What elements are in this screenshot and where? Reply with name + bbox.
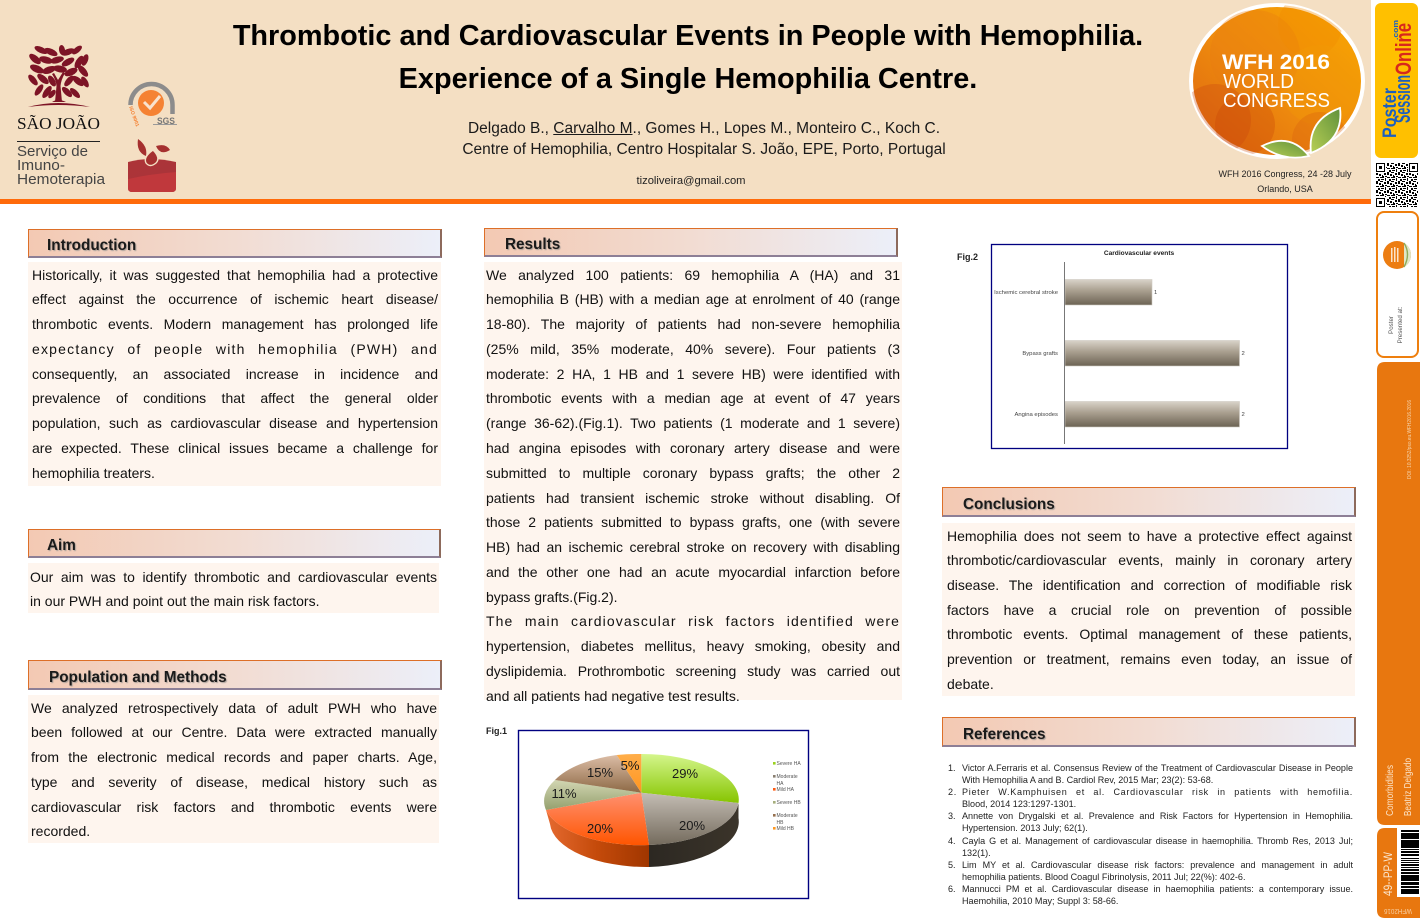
panel: poster number and barcode: WFH2016 [1384,907,1412,914]
text: Results: hemophilia B (HB) with a median age at enrolment of 40 (range [486,291,900,307]
pie chart: patient distribution: 20% [587,821,613,836]
QR code [1376,163,1418,207]
text: Population and Methods: been followed at our Centre. Data were extracted manually [31,724,437,740]
text: Aim: in our PWH and point out the main risk factors. [30,593,319,609]
heading: Population and Methods: Population and Methods [49,669,227,686]
heading: Aim: Aim [47,537,76,554]
reference list: 2. [948,787,957,797]
congress details: Orlando, USA [1257,184,1313,194]
text: Introduction: are expected. These clinical issues became a challenge for [32,440,438,456]
icon: ISO SGS certification seal [127,82,177,128]
panel: presented at [1376,211,1419,358]
text: Results: dyslipidemia. Prothrombotic screening study was carried out [486,663,900,679]
pie chart: patient distribution: 5% [621,758,640,773]
figure label: Fig.1: Fig.1 [486,726,507,736]
text: Population and Methods: We analyzed retrospectively data of adult PWH who have [31,700,437,716]
reference list: 1. [948,763,956,773]
header rule [0,199,1371,204]
pie chart: patient distribution: 20% [679,818,705,833]
text: Results: bypass grafts.(Fig.2). [486,589,618,605]
panel: poster session brand [1375,3,1418,158]
text: Introduction: population, such as cardiovascular disease and hypertension [32,415,438,431]
pie chart: patient distribution: 15% [587,765,613,780]
pie chart: patient distribution: Mild HA [776,787,795,793]
bar chart: cardiovascular events: 1 [1154,290,1157,296]
text: Conclusions: thrombotic/cardiovascular events, mainly in coronary artery [947,552,1352,568]
text: Results: hypertension, diabetes mellitus, heavy smoking, obesity and [486,638,900,654]
figure label: Fig.2: Fig.2 [957,252,978,262]
bar chart: cardiovascular events: Cardiovascular events [1104,250,1175,257]
pie chart: patient distribution: Moderate [776,813,798,819]
header band [0,0,1371,204]
text: Population and Methods: recorded. [31,823,90,839]
panel: poster session brand: Poster [1380,87,1401,138]
text: Results: and all patients had negative test results. [486,688,740,704]
pie chart: patient distribution: Moderate [776,774,798,780]
text: Introduction [28,262,441,486]
text: Results [484,262,902,700]
logo: Sao Joao hospital: Hemoterapia [17,171,106,188]
heading: References: References [963,726,1045,743]
logo: WFH 2016 World Congress: CONGRESS [1223,90,1330,112]
text: Results: (range 36-62).(Fig.1). Two patients (1 moderate and 1 severe) [486,415,900,431]
reference list [948,763,1353,906]
pie chart: patient distribution: Mild HB [776,826,795,832]
heading: Conclusions [942,487,1356,517]
heading: Introduction [28,229,442,258]
bar chart: cardiovascular events: 2 [1242,412,1245,418]
logo: Sao Joao hospital: SÃO JOÃO [17,114,100,133]
text: Introduction: thrombotic events. Modern management has prolonged life [32,316,438,332]
logo: Sao Joao hospital [17,45,106,188]
text: Introduction: Historically, it was suggested that hemophilia had a protective [32,266,438,282]
pie chart: patient distribution [518,730,810,900]
logo: WFH 2016 World Congress: WFH 2016 [1222,51,1330,74]
text: Results: We analyzed 100 patients: 69 hemophilia A (HA) and 31 [486,266,900,282]
panel: poster topic and author: Comorbidities [1384,765,1396,816]
heading: Population and Methods [28,660,442,690]
panel: poster session brand: Session [1390,75,1415,123]
bar chart: cardiovascular events: Ischemic cerebral stroke [994,290,1059,296]
text: Results: HB) had an ischemic cerebral stroke on recovery with disabling [486,539,900,555]
text: Results: 18-80). The majority of patients had non-severe hemophilia [486,316,900,332]
reference list: Haemohilia, 2010 May; Suppl 3: 58-66. [962,896,1118,906]
text: Conclusions: Hemophilia does not seem to have a protective effect against [947,528,1352,544]
icon: blood drop and leaves [128,139,176,192]
text: Results: thrombotic events with a median age at event of 47 years [486,390,900,406]
text: Results: those 2 patients submitted to bypass grafts, one (with severe [486,514,900,530]
text: Introduction: effect against the occurrence of ischemic heart disease/ [32,291,438,307]
text: Population and Methods: cardiovascular risk factors and thrombotic events were [31,799,437,815]
text: Population and Methods [28,695,439,843]
heading: Aim [28,529,441,558]
text: Results: moderate: 2 HA, 1 HB and 1 severe HB) were identified with [486,366,900,382]
title: Experience of a Single Hemophilia Centre. [399,62,977,94]
pie chart: patient distribution: 11% [551,786,577,801]
heading: Results [484,228,898,257]
text: Conclusions [942,523,1355,696]
reference list: Victor A.Ferraris et al. Consensus Review of the Treatment of Cardiovascular Disease in People [962,763,1353,773]
panel: poster number and barcode [1377,828,1420,918]
logo: Sao Joao hospital: Imuno- [17,157,65,174]
text: Results: (25% mild, 35% moderate, 40% severe). Four patients (3 [486,341,900,357]
pie chart: patient distribution: HA [776,781,784,787]
authors and affiliation [462,120,946,158]
panel: poster topic and author: DOI: 10.3252/pso.eu.WFH2016.2016 [1407,400,1413,479]
text: Introduction: expectancy of people with hemophilia (PWH) and [32,341,438,357]
reference list: Cayla G et al. Management of cardiovascular disease in haemophilia. Thromb Res, 2013 Jul; [962,836,1353,846]
heading: Results: Results [505,236,560,253]
reference list: Blood, 2014 123:1297-1301. [962,799,1076,809]
heading: Conclusions: Conclusions [963,496,1055,513]
text: Introduction: consequently, an associated increase in incidence and [32,366,438,382]
text: Results: submitted to multiple coronary bypass grafts; the other 2 [486,465,900,481]
panel: poster topic and author: Beatriz Delgado [1402,758,1414,816]
bar chart: cardiovascular events: Angina episodes [1014,412,1058,418]
pie chart: patient distribution: HB [776,820,784,826]
reference list: 4. [948,836,956,846]
pie chart: patient distribution: Severe HA [776,761,801,767]
text: Results: patients had transient ischemic stroke without disabling. Of [486,490,900,506]
text: Results: and the other one had an acute myocardial infarction before [486,564,900,580]
text: Conclusions: disease. The identification and correction of modifiable risk [947,577,1352,593]
panel: poster session brand: Online [1391,23,1416,75]
logo: WFH 2016 World Congress: WORLD [1223,71,1294,93]
text: Aim: Our aim was to identify thrombotic and cardiovascular events [30,568,437,584]
reference list: Pieter W.Kamphuisen et al. Cardiovascular risk in patients with hemofilia. [962,787,1353,797]
reference list: 6. [948,884,956,894]
reference list: Lim MY et al. Cardiovascular disease risk factors: prevalence and management in adult [962,860,1353,870]
reference list: Hypertension. 2013 July; 62(1). [962,823,1088,833]
icon: ISO SGS certification seal: ISO 9001 [127,106,140,128]
text: Aim [28,563,439,613]
congress details: WFH 2016 Congress, 24 -28 July [1218,169,1352,179]
icon: ISO SGS certification seal: SGS [157,116,175,126]
text: Results: The main cardiovascular risk factors identified were [486,613,900,629]
authors and affiliation: Centre of Hemophilia, Centro Hospitalar S. João, EPE, Porto, Portugal [462,141,946,158]
text: Conclusions: thrombotic events. Optimal management of these patients, [947,626,1352,642]
reference list: With Hemophilia A and B. Cardiol Rev, 2015 Mar; 23(2): 53-68. [962,775,1213,785]
text: Introduction: hemophilia treaters. [32,465,155,481]
panel: presented at: Presented at: [1397,306,1404,343]
reference list: 3. [948,811,956,821]
reference list: 132(1). [962,848,991,858]
panel: presented at: Poster [1388,316,1395,334]
text: Conclusions: factors have a crucial role on prevention of possible [947,602,1352,618]
logo: WFH 2016 World Congress [1189,3,1365,159]
pie chart: patient distribution: 29% [672,766,698,781]
bar chart: cardiovascular events: 2 [1242,351,1245,357]
text: Conclusions: prevention or treatment, remains even today, an issue of [947,651,1352,667]
panel: poster session brand: .com [1391,20,1400,40]
title [233,20,1143,94]
text: Conclusions: debate. [947,676,994,692]
reference list: Annette von Drygalski et al. Prevalence and Risk Factors for Hypertension in Hemophilia. [962,811,1353,821]
contact email: tizoliveira@gmail.com [637,175,745,187]
panel: poster number and barcode: 49--PP-W [1381,851,1395,896]
reference list: Mannucci PM et al. Cardiovascular disease in haemophilia patients: a contemporary issue. [962,884,1353,894]
reference list: 5. [948,860,956,870]
panel: poster topic and author [1377,362,1420,825]
bar chart: cardiovascular events: Bypass grafts [1022,351,1058,357]
heading: References [942,717,1356,747]
logo: Sao Joao hospital: Serviço de [17,143,88,160]
text: Introduction: prevalence of conditions that affect the general older [32,390,438,406]
heading: Introduction: Introduction [47,237,136,254]
bar chart: cardiovascular events [990,244,1288,450]
pie chart: patient distribution: Severe HB [776,800,801,806]
text: Population and Methods: type and severity of disease, medical history such as [31,774,437,790]
text: Results: had angina episodes with coronary artery disease and were [486,440,900,456]
text: Population and Methods: from the electronic medical records and paper charts. Age, [31,749,437,765]
authors and affiliation: Delgado B., Carvalho M., Gomes H., Lopes M., Monteiro C., Koch C. [468,120,940,137]
reference list: hemophilia patients. Blood Coagul Fibrinolysis, 2011 Jul; 22(%): 402-6. [962,872,1245,882]
congress details [1218,169,1352,194]
title: Thrombotic and Cardiovascular Events in People with Hemophilia. [233,20,1143,52]
